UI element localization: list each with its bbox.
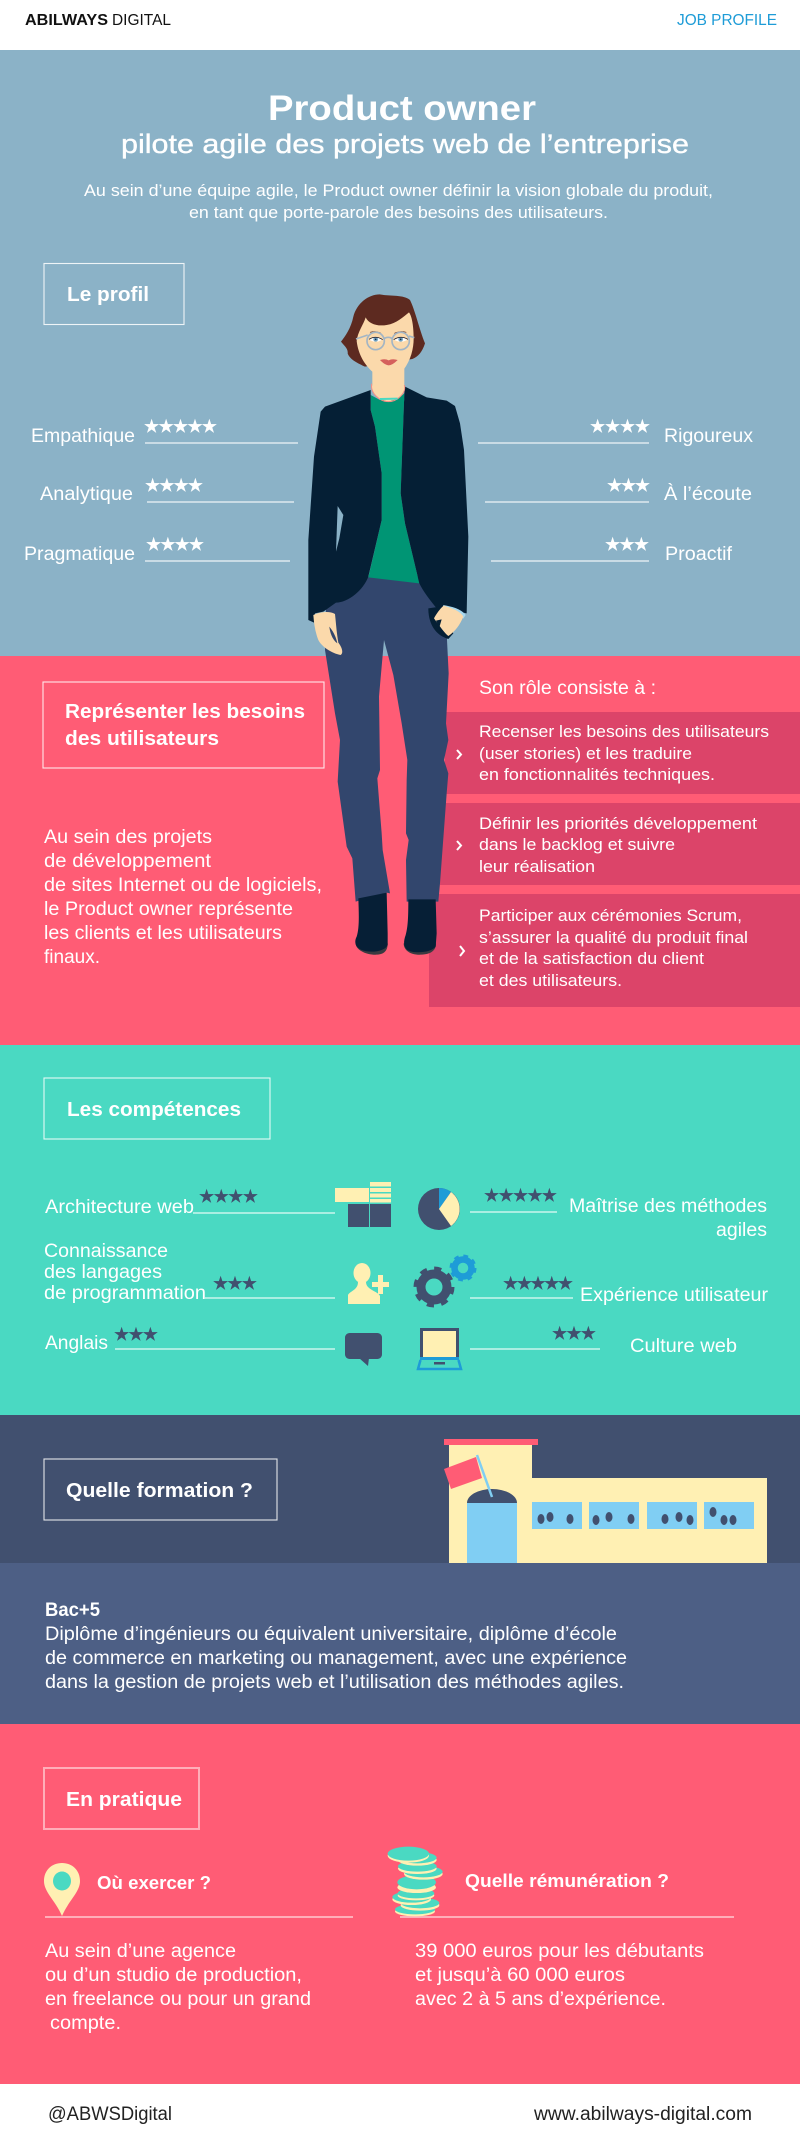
green top and jacket <box>308 387 468 623</box>
profile ratings right: ★★★★ <box>590 417 650 437</box>
skills right: Culture web <box>630 1336 737 1357</box>
role item 2 <box>457 815 757 876</box>
subtitle: pilote agile des projets web de l’entreprise <box>121 129 689 159</box>
profile ratings left: Pragmatique <box>24 544 135 565</box>
subheading: où exercer: Où exercer ? <box>97 1873 211 1893</box>
icon: coin stack <box>388 1847 443 1916</box>
skills left: Architecture web <box>45 1197 194 1218</box>
heading: les compétences <box>44 1078 270 1139</box>
role item 2: leur réalisation <box>479 858 595 876</box>
footer: @ABWSDigital <box>48 2104 172 2125</box>
header label: job profile: JOB PROFILE <box>677 12 777 29</box>
text: rémunération: avec 2 à 5 ans d’expérience. <box>415 1989 666 2010</box>
text: description <box>44 827 322 968</box>
skills left: ★★★ <box>213 1274 257 1294</box>
icon: gears <box>416 1256 475 1305</box>
role item 3: s’assurer la qualité du produit final <box>479 929 748 947</box>
icon: pie chart <box>418 1188 460 1230</box>
text: rémunération: et jusqu’à 60 000 euros <box>415 1965 625 1986</box>
skills left <box>44 1187 335 1354</box>
text: rémunération <box>415 1941 704 2010</box>
text: où exercer: en freelance ou pour un grand <box>45 1989 311 2010</box>
profile ratings left: Empathique <box>31 426 135 447</box>
footer <box>48 2104 752 2125</box>
skills right <box>470 1186 769 1357</box>
trousers and boots <box>325 577 449 955</box>
intro text: en tant que porte-parole des besoins des utilisateurs. <box>189 204 608 222</box>
intro text <box>84 182 713 222</box>
profile ratings right <box>478 417 754 565</box>
heading: représenter les besoins: Représenter les besoins <box>65 701 305 723</box>
icon: map pin <box>44 1863 80 1916</box>
skills left: Connaissance <box>44 1241 168 1262</box>
role item 1 <box>457 723 769 784</box>
profile ratings left: ★★★★ <box>146 535 204 555</box>
profile ratings left: ★★★★★ <box>144 417 217 437</box>
hands <box>313 605 466 655</box>
text: formation <box>45 1600 627 1693</box>
text: description: Au sein des projets <box>44 827 212 848</box>
text: description: de sites Internet ou de logiciels, <box>44 875 322 896</box>
skills left: des langages <box>44 1262 162 1283</box>
text: description: le Product owner représente <box>44 899 293 920</box>
head <box>341 294 425 402</box>
profile ratings left <box>24 417 298 565</box>
title: Product owner <box>268 89 536 128</box>
heading: le profil: Le profil <box>67 284 149 306</box>
role item 1: Recenser les besoins des utilisateurs <box>479 723 769 741</box>
icon: web layout <box>335 1182 391 1227</box>
heading: en pratique <box>44 1768 199 1829</box>
heading: représenter les besoins <box>43 682 324 768</box>
role heading: Son rôle consiste à : <box>479 678 656 699</box>
skills right: Expérience utilisateur <box>580 1285 769 1306</box>
skills right: ★★★★★ <box>484 1186 557 1206</box>
role item 3: et des utilisateurs. <box>479 972 622 990</box>
header logo: ABILWAYS <box>25 12 108 29</box>
text: rémunération: 39 000 euros pour les débutants <box>415 1941 704 1962</box>
heading: les compétences: Les compétences <box>67 1099 241 1121</box>
skills right: ★★★ <box>552 1324 596 1344</box>
text: formation: Bac+5 <box>45 1600 100 1621</box>
necklace <box>371 384 405 405</box>
skills left: Anglais <box>45 1333 108 1354</box>
profile ratings right: Proactif <box>665 544 733 565</box>
skills right: ★★★★★ <box>503 1274 573 1294</box>
role item 2: dans le backlog et suivre <box>479 836 675 854</box>
heading: quelle formation <box>44 1459 277 1520</box>
profile ratings right: À l’écoute <box>664 484 752 505</box>
header logo <box>25 12 171 29</box>
role item 1: (user stories) et les traduire <box>479 745 692 763</box>
text: où exercer: ou d’un studio de production, <box>45 1965 302 1986</box>
role item 1: en fonctionnalités techniques. <box>479 766 715 784</box>
text: formation: Diplôme d’ingénieurs ou équivalent universitaire, diplôme d’école <box>45 1624 617 1645</box>
footer: www.abilways-digital.com <box>533 2104 752 2125</box>
role item 3: et de la satisfaction du client <box>479 950 704 968</box>
text: description: de développement <box>44 851 212 872</box>
icon: laptop <box>418 1328 461 1369</box>
profile ratings left: ★★★★ <box>145 476 203 496</box>
intro text: Au sein d’une équipe agile, le Product owner définir la vision globale du produit, <box>84 182 713 200</box>
skills right: Maîtrise des méthodes <box>569 1196 767 1217</box>
skills left: ★★★★ <box>199 1187 258 1207</box>
icon: user plus <box>348 1263 389 1304</box>
heading: quelle formation: Quelle formation ? <box>66 1480 253 1502</box>
skills left: de programmation <box>44 1283 206 1304</box>
illustration: woman <box>308 294 468 955</box>
header logo: DIGITAL <box>112 12 171 29</box>
text: description: les clients et les utilisateurs <box>44 923 282 944</box>
heading: représenter les besoins: des utilisateurs <box>65 728 219 750</box>
text: description: finaux. <box>44 947 100 968</box>
illustration: school building <box>444 1439 767 1563</box>
text: formation: de commerce en marketing ou management, avec une expérience <box>45 1648 627 1669</box>
role item 3 <box>460 907 748 990</box>
heading: en pratique: En pratique <box>66 1789 182 1811</box>
text: formation: dans la gestion de projets web et l’utilisation des méthodes agiles. <box>45 1672 624 1693</box>
subheading: quelle rémunération: Quelle rémunération ? <box>465 1871 669 1891</box>
profile ratings right: ★★★ <box>607 476 650 496</box>
role item 2: Définir les priorités développement <box>479 815 757 833</box>
text: où exercer: compte. <box>50 2013 121 2034</box>
profile ratings right: Rigoureux <box>664 426 754 447</box>
profile ratings left: Analytique <box>40 484 133 505</box>
icon: speech bubble <box>345 1333 382 1366</box>
text: où exercer <box>45 1941 311 2034</box>
text: où exercer: Au sein d’une agence <box>45 1941 236 1962</box>
role panels <box>429 712 800 1007</box>
skills left: ★★★ <box>114 1325 158 1345</box>
skills right: agiles <box>716 1220 767 1241</box>
role item 3: Participer aux cérémonies Scrum, <box>479 907 742 925</box>
profile ratings right: ★★★ <box>605 535 649 555</box>
heading: le profil <box>44 264 184 324</box>
